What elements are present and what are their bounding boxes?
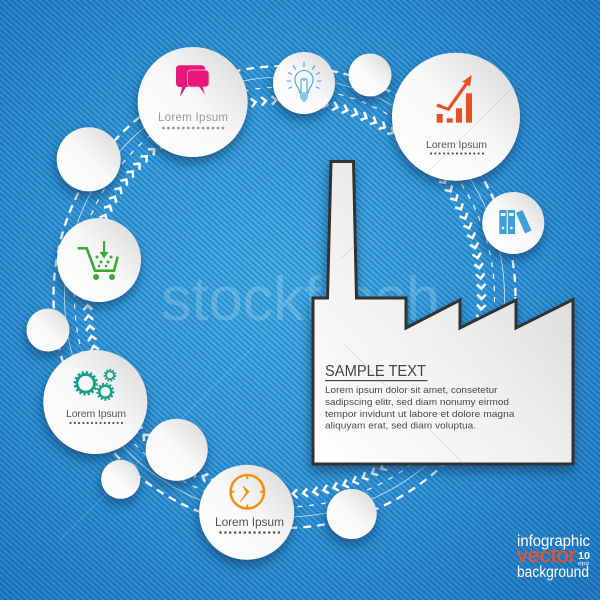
label: Lorem Ipsum xyxy=(215,515,284,529)
icon: binders xyxy=(499,210,532,234)
brand logo xyxy=(517,533,590,581)
panel: binders circle xyxy=(482,192,544,254)
brand logo: vector xyxy=(517,545,576,567)
body text: sadipscing elitr, sed diam nonumy eirmod xyxy=(325,397,509,407)
panel: factory xyxy=(313,162,573,464)
panel: small blank circle upper left xyxy=(57,127,121,191)
factory outline xyxy=(313,162,573,464)
label: Lorem Ipsum xyxy=(66,408,126,420)
heading rule xyxy=(325,380,428,381)
ring: thin line xyxy=(64,77,504,517)
body text: aliquyam erat, sed diam voluptua. xyxy=(325,420,476,430)
dots xyxy=(220,531,279,534)
panel: cart circle xyxy=(57,218,141,302)
icon: speech bubbles xyxy=(176,65,209,97)
brand logo: infographic xyxy=(517,533,590,550)
icon: clock xyxy=(231,475,264,508)
panel: gears circle xyxy=(43,350,147,454)
label: Lorem Ipsum xyxy=(426,139,487,151)
icon: light bulb xyxy=(286,62,322,101)
watermark: stockfresh xyxy=(161,265,440,334)
dots xyxy=(70,422,122,424)
panel: clock circle xyxy=(199,465,294,560)
panel: blank circle lower xyxy=(146,419,208,481)
panel: speech bubbles circle xyxy=(138,47,248,157)
dots xyxy=(431,152,483,155)
ring: inner dashed xyxy=(74,87,494,507)
body text xyxy=(325,385,515,430)
panel: small blank circle top xyxy=(348,54,392,96)
dots xyxy=(164,127,223,129)
heading: SAMPLE TEXT xyxy=(325,363,426,380)
panel: chart circle xyxy=(392,53,520,181)
ring: chevron arrows xyxy=(0,83,534,567)
panel: small blank circle bottom left xyxy=(101,460,140,499)
ring: outer dashed xyxy=(54,66,516,528)
brand logo: 10 xyxy=(578,551,590,562)
label: Lorem Ipsum xyxy=(158,112,228,124)
body text: tempor invidunt ut labore et dolore magna xyxy=(325,409,515,419)
icon: shopping cart xyxy=(78,241,118,280)
panel: blank circle bottom xyxy=(327,489,377,539)
panel: bulb circle xyxy=(273,52,335,114)
body text: Lorem ipsum dolor sit amet, consetetur xyxy=(325,385,498,395)
brand logo: eps xyxy=(578,561,590,567)
icon: gears xyxy=(75,370,116,400)
icon: rising chart xyxy=(436,75,472,123)
panel: small blank circle left xyxy=(26,308,70,352)
watermark diagonal lines xyxy=(60,70,530,540)
brand logo: background xyxy=(517,564,589,581)
